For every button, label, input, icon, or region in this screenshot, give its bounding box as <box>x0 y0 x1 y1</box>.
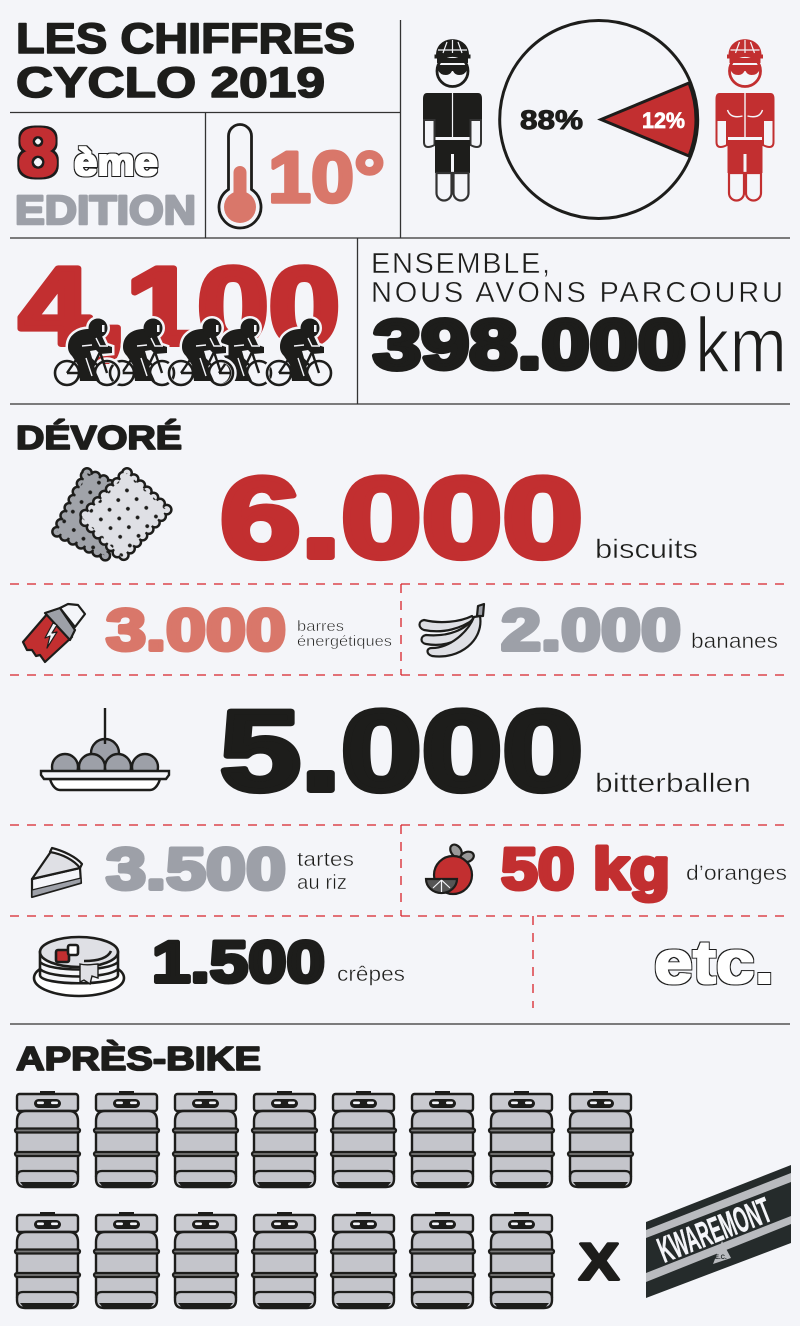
logo: Kwaremont: BEDROUWEN VOOR KOPMANNEN <box>662 1180 775 1230</box>
edition badge: EDITION <box>15 187 196 233</box>
stat: oranges: 50 kg <box>501 837 670 902</box>
stat: oranges: d’oranges <box>686 862 787 885</box>
kegs row 2 <box>15 1212 554 1308</box>
stat: rice tarts <box>106 837 354 902</box>
participants number: 4,100 <box>19 245 340 368</box>
stat: crêpes: 1.500 <box>152 930 325 995</box>
distance block: NOUS AVONS PARCOURU <box>371 277 783 309</box>
logo: Kwaremont: PITTIG BLOND <box>690 1235 749 1264</box>
stat: crêpes: crêpes <box>337 963 405 986</box>
edition badge: 8 <box>18 115 58 191</box>
stat: energy bars: énergétiques <box>297 633 392 650</box>
heading: dévoré: DÉVORÉ <box>16 419 182 456</box>
distance block: km <box>695 301 787 389</box>
icon: bananas <box>420 604 484 657</box>
stat: bitterballen: 5.000 <box>220 688 583 815</box>
kegs row 1 <box>15 1091 633 1187</box>
icon: pancakes <box>34 937 124 996</box>
pie chart: 12% <box>642 108 685 133</box>
stat: energy bars: barres <box>297 618 344 635</box>
distance block: ENSEMBLE, <box>371 248 550 280</box>
logo: Kwaremont <box>646 1165 791 1298</box>
stat: bitterballen: bitterballen <box>595 768 751 798</box>
stat: bananas: 2.000 <box>501 598 681 663</box>
stat: bitterballen <box>220 688 751 815</box>
multiply sign: X <box>579 1234 619 1292</box>
icon: orange <box>426 842 475 894</box>
icon: rice tart <box>32 848 82 897</box>
stat: rice tarts: au riz <box>297 872 347 894</box>
icon: energy bar <box>23 604 85 662</box>
icon: thermometer <box>219 124 261 228</box>
stat: bananas: bananes <box>691 630 778 653</box>
icon: black cyclist <box>423 39 482 201</box>
stat: oranges <box>501 837 787 902</box>
distance block <box>371 248 787 389</box>
temperature: 10° <box>268 138 385 218</box>
icon: red cyclist <box>716 39 774 201</box>
stat: biscuits: 6.000 <box>220 455 583 582</box>
stat: energy bars <box>106 598 392 663</box>
icon: riders group <box>54 318 332 386</box>
pie chart: 88% <box>520 105 583 135</box>
stat: biscuits <box>220 455 698 582</box>
stat: energy bars: 3.000 <box>106 598 286 663</box>
etc label: etc. <box>654 929 774 996</box>
icon: biscuits <box>57 473 167 557</box>
icon: bitterballen plate <box>41 708 169 790</box>
title <box>16 15 355 107</box>
stat: rice tarts: 3.500 <box>106 837 286 902</box>
stat: rice tarts: tartes <box>297 849 354 871</box>
title: LES CHIFFRES <box>16 15 355 63</box>
distance block: 398.000 <box>373 306 686 384</box>
title: CYCLO 2019 <box>16 59 325 107</box>
stat: bananas <box>501 598 778 663</box>
stat: biscuits: biscuits <box>595 534 698 564</box>
edition badge <box>15 115 196 233</box>
heading: après-bike: APRÈS-BIKE <box>16 1040 261 1077</box>
stat: crêpes <box>152 930 405 995</box>
pie chart <box>500 20 698 218</box>
edition badge: ème <box>74 142 158 184</box>
logo: Kwaremont: E.C. <box>715 1255 727 1261</box>
